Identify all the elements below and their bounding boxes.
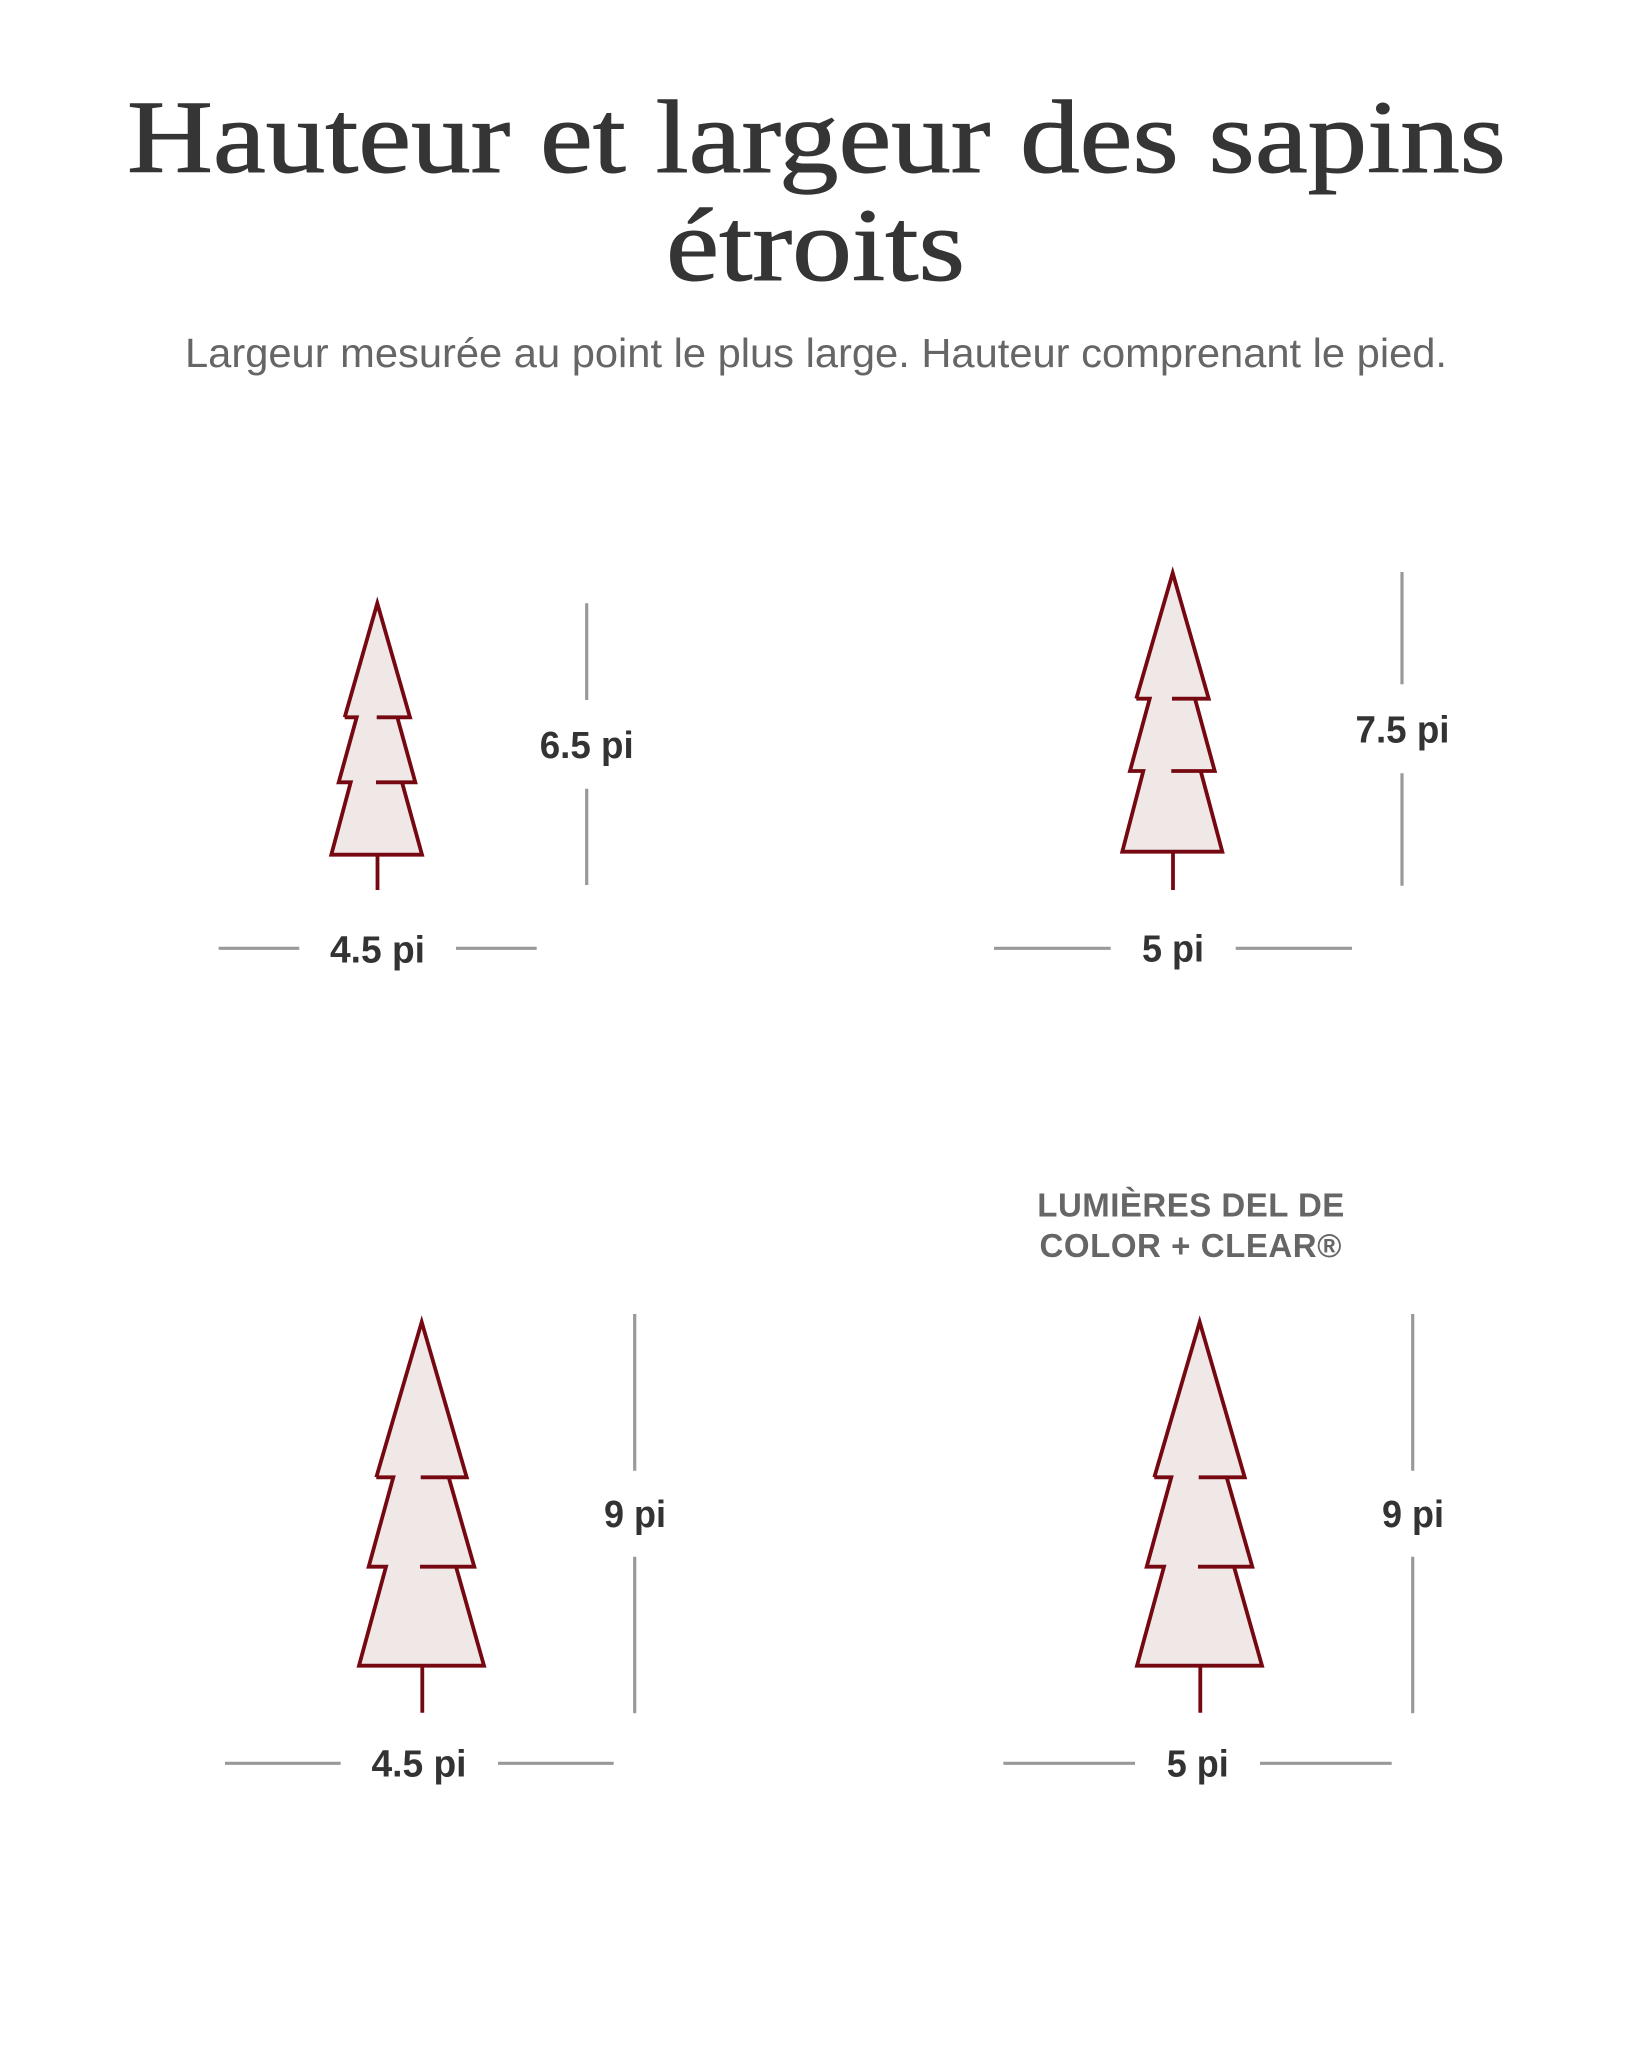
title: étroits [666,188,965,303]
label: lights: LUMIÈRES DEL DE [1037,1187,1344,1224]
width measure: 4.5 pi: 4.5 pi [330,929,425,971]
height measure: 7.5 pi: 7.5 pi [1356,710,1450,752]
icon: tree 7.5 pi [1122,573,1222,890]
height measure: 9 pi: 9 pi [1382,1494,1444,1536]
label: lights: COLOR + CLEAR® [1040,1227,1342,1264]
label: lights [1037,1187,1344,1264]
icon: tree 9 pi wide [1137,1322,1262,1713]
icon: tree 6.5 pi [331,603,422,890]
title [127,80,1506,303]
height measure: 6.5 pi: 6.5 pi [540,725,634,767]
panel: tree 6.5 pi by 4.5 pi [219,603,634,971]
panel: tree 7.5 pi by 5 pi [994,572,1450,970]
icon: tree 9 pi narrow [359,1322,484,1713]
width measure: 4.5 pi: 4.5 pi [372,1743,466,1785]
subtitle: Largeur mesurée au point le plus large. Hauteur comprenant le pied. [185,330,1447,376]
width measure: 5 pi: 5 pi [1142,928,1204,970]
title: Hauteur et largeur des sapins [127,80,1506,195]
height measure: 9 pi: 9 pi [604,1494,666,1536]
width measure: 5 pi: 5 pi [1167,1744,1229,1786]
panel: tree 9 pi by 5 pi with lights label [1003,1187,1444,1786]
panel: tree 9 pi by 4.5 pi [225,1314,666,1785]
